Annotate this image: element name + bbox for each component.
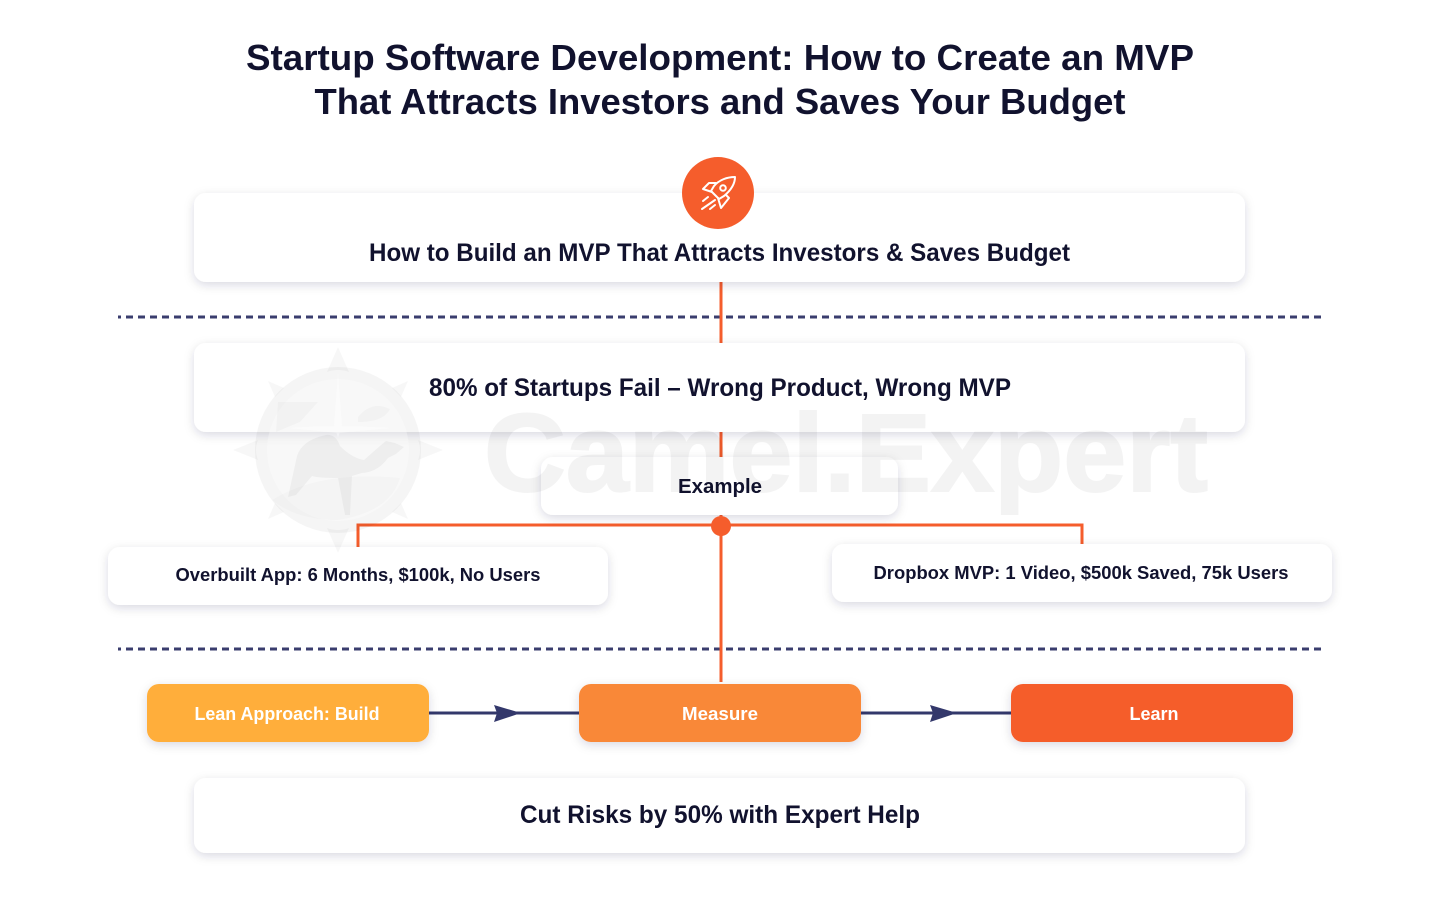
card: 80% of startups fail <box>194 343 1245 432</box>
watermark: wordmark: Camel.Expert <box>484 392 1208 515</box>
card: overbuilt app: Overbuilt App: 6 Months, $100k, No Users <box>176 564 540 585</box>
step: lean approach build: Lean Approach: Build <box>194 703 380 724</box>
card: example: Example <box>678 475 762 498</box>
step: lean approach build <box>147 684 429 742</box>
title: Startup Software Development: How to Create an MVP <box>246 37 1194 78</box>
card: 80% of startups fail: 80% of Startups Fail – Wrong Product, Wrong MVP <box>429 374 1011 402</box>
card: cut risks <box>194 778 1245 853</box>
card: overbuilt app <box>108 547 608 605</box>
arrow: measure to learn <box>861 705 1011 722</box>
step: measure <box>579 684 861 742</box>
card: how to build: How to Build an MVP That Attracts Investors & Saves Budget <box>369 239 1071 267</box>
card: cut risks: Cut Risks by 50% with Expert Help <box>520 801 920 829</box>
watermark: compass emblem <box>233 347 443 553</box>
card: example <box>541 457 898 515</box>
connector lines <box>358 282 1082 682</box>
card: how to build <box>194 193 1245 282</box>
arrow: build to measure <box>429 705 579 722</box>
icon: rocket <box>682 157 754 229</box>
title: That Attracts Investors and Saves Your Budget <box>314 81 1126 122</box>
step: learn: Learn <box>1130 703 1178 724</box>
junction dot <box>711 516 731 536</box>
card: dropbox mvp <box>832 544 1332 602</box>
step: learn <box>1011 684 1293 742</box>
dotted divider lines <box>118 317 1322 649</box>
step: measure: Measure <box>682 703 758 724</box>
title <box>246 37 1194 122</box>
card: dropbox mvp: Dropbox MVP: 1 Video, $500k Saved, 75k Users <box>874 562 1288 583</box>
